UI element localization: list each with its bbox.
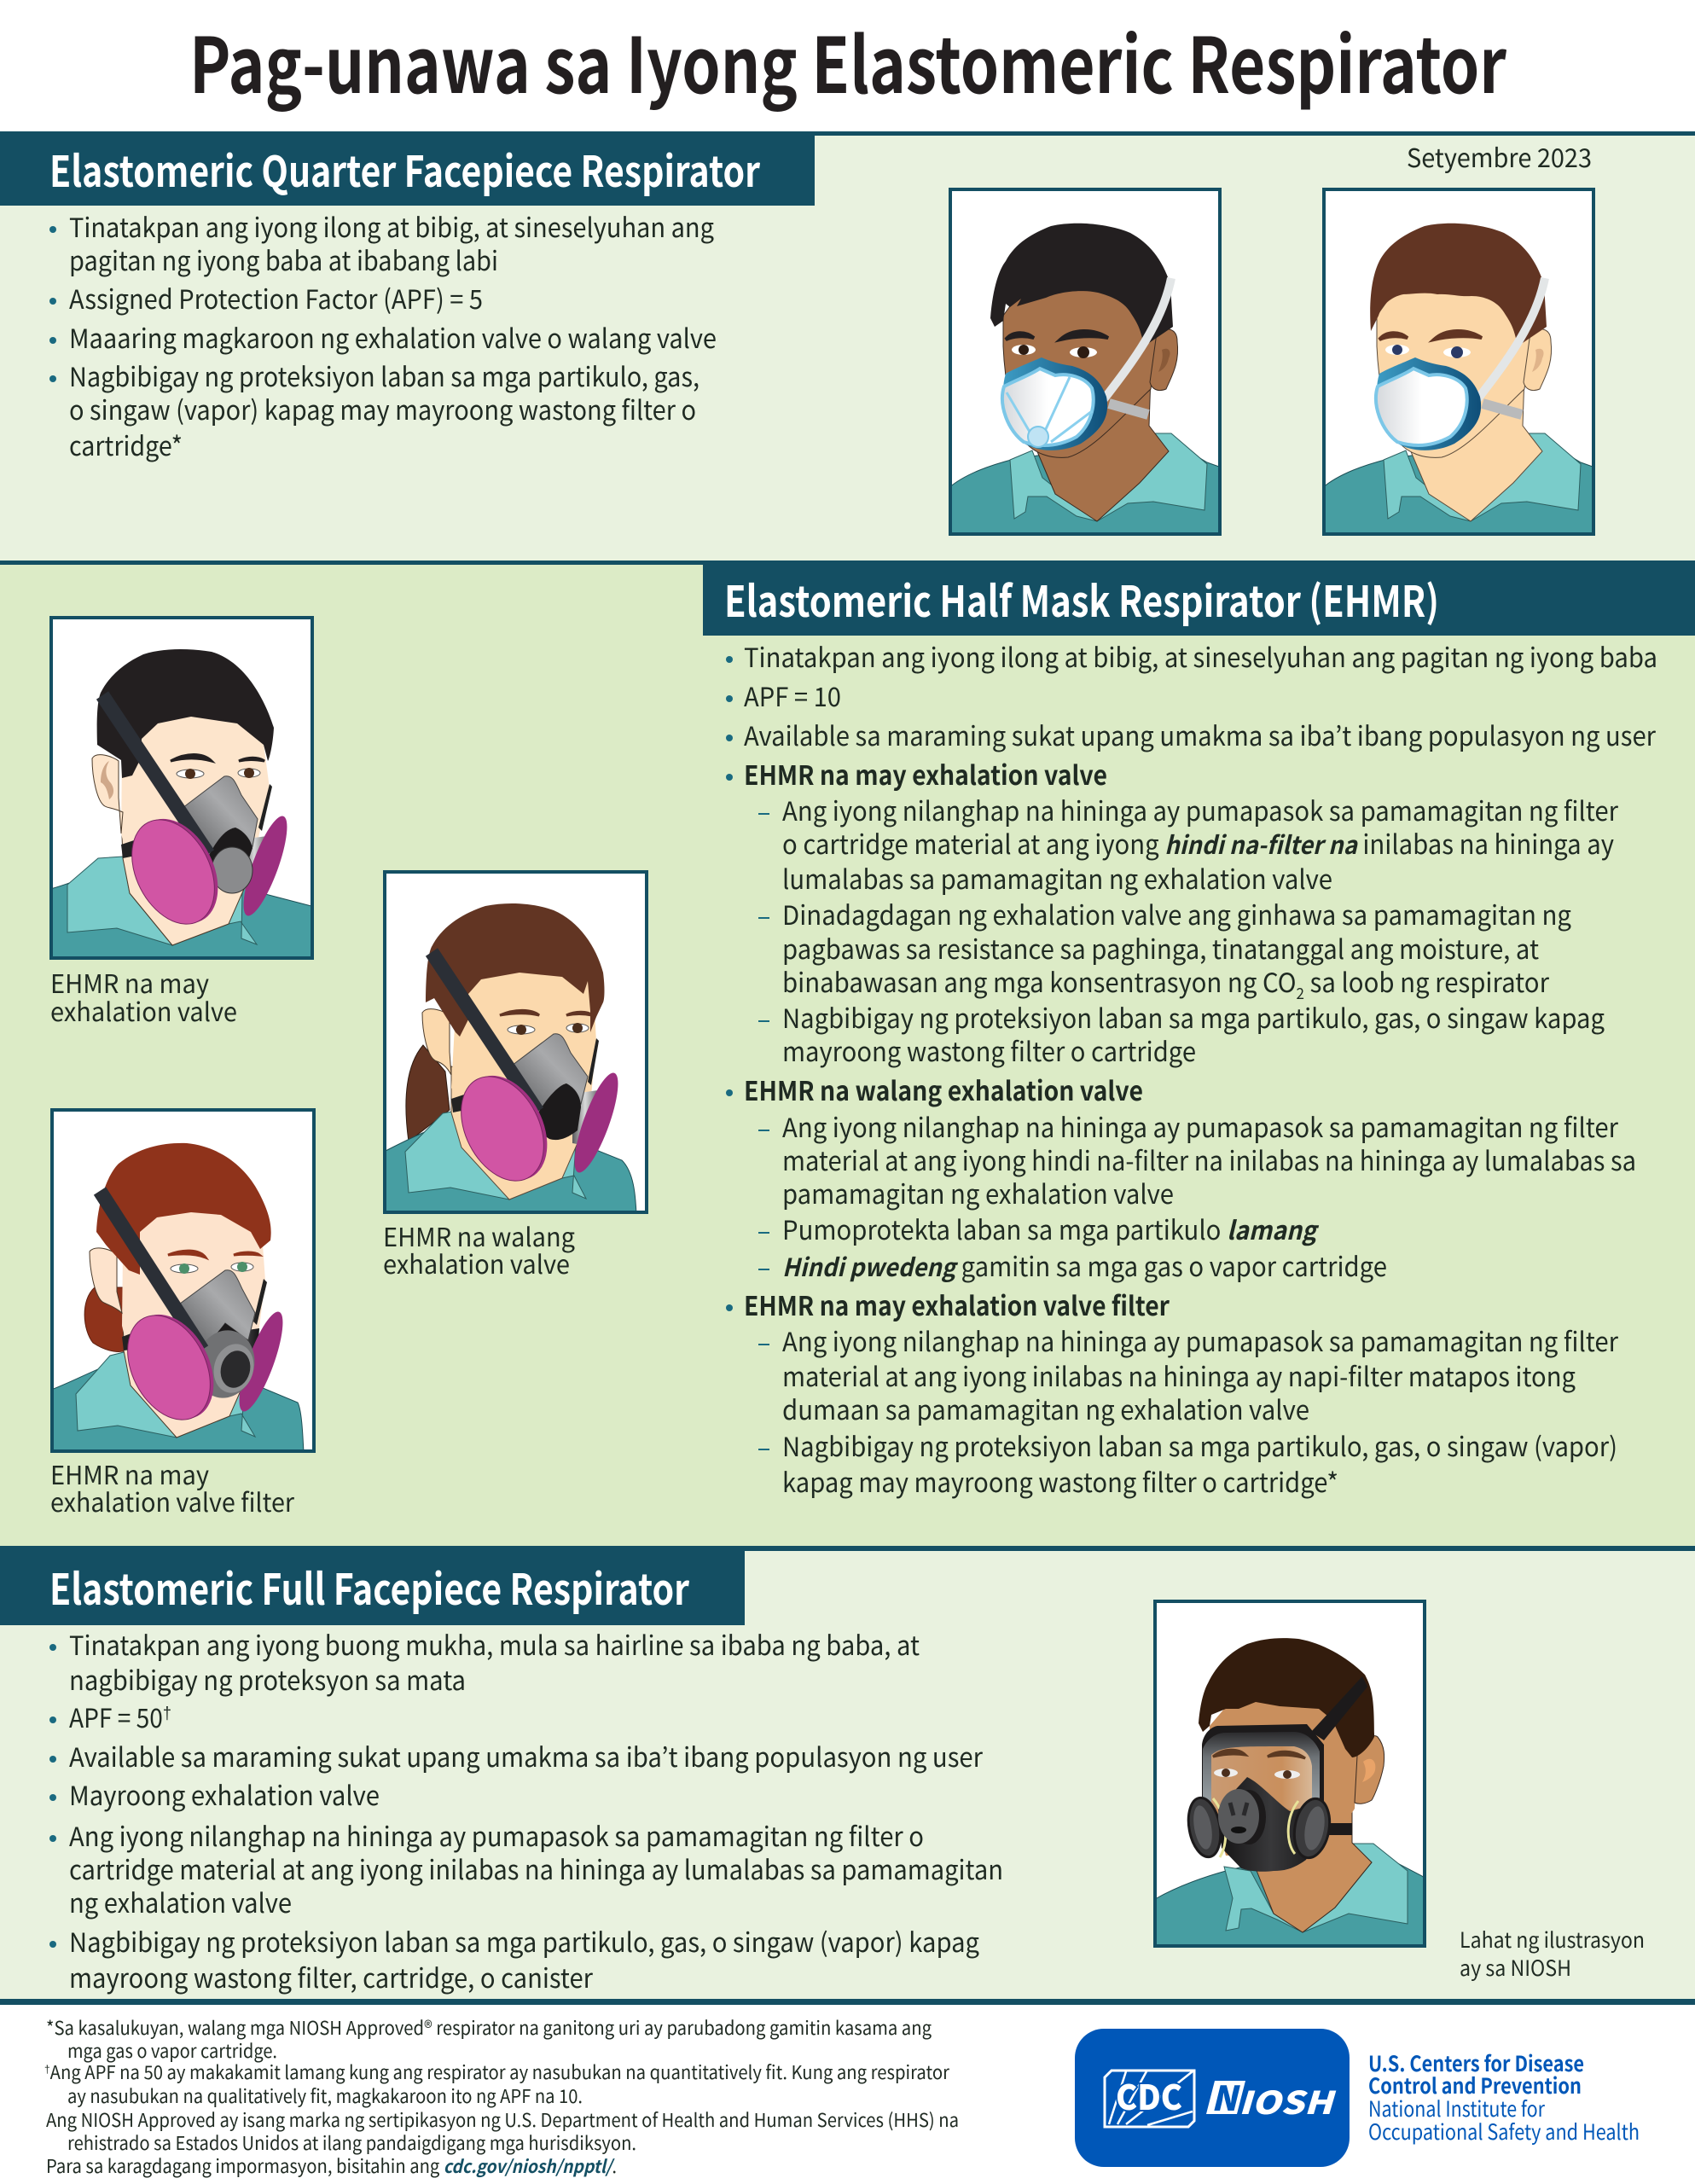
heading: half mask: Elastomeric Half Mask Respirator (EHMR)	[724, 568, 1439, 630]
illustration credit: ay sa NIOSH	[1460, 1952, 1571, 1983]
caption: EHMR without exhalation valve	[383, 1217, 575, 1281]
icon: NIOSH mark	[1206, 2071, 1337, 2123]
caption: EHMR with exhalation valve: exhalation valve	[50, 991, 237, 1029]
caption: EHMR with exhalation valve: EHMR na may	[50, 963, 209, 1001]
divider	[0, 1999, 1695, 2005]
bullet group: EHMR without exhalation valve	[726, 1070, 1636, 1284]
footnotes	[44, 2013, 959, 2179]
panel: half mask respirator	[0, 561, 1695, 1548]
bullet list: full facepiece: †	[163, 1705, 171, 1723]
footnotes: rehistrado sa Estados Unidos at ilang pandaigdigang mga hurisdiksyon.	[67, 2129, 636, 2156]
footnotes: †	[44, 2063, 50, 2076]
bullet list: half mask general	[726, 636, 1657, 753]
bullet list: quarter facepiece: Assigned Protection Factor (APF) = 5	[69, 278, 483, 317]
bullet list: full facepiece: mayroong wastong filter, cartridge, o canister	[69, 1957, 594, 1995]
illustration: EHMR without exhalation valve	[386, 874, 645, 1211]
bullet group: EHMR with exhalation valve: binabawasan ang mga konsentrasyon ng CO	[782, 961, 1325, 1000]
bullet group: EHMR with exhalation valve	[726, 754, 1619, 1069]
agency name: National Institute for	[1368, 2093, 1545, 2123]
footnotes: Ang NIOSH Approved ay isang marka ng sertipikasyon ng U.S. Department of Health and Human Services (HHS) na	[46, 2106, 959, 2133]
bullet group: EHMR with exhalation valve: lumalabas sa pamamagitan ng exhalation valve	[782, 858, 1332, 897]
bullet group: EHMR with exhalation valve filter: dumaan sa pamamagitan ng exhalation valve	[782, 1389, 1309, 1427]
bullet group: EHMR with exhalation valve filter: material at ang iyong inilabas na hininga ay napi-filter matapos itong	[782, 1356, 1576, 1394]
bullet list: full facepiece: Mayroong exhalation valve	[69, 1774, 380, 1813]
bullet list: quarter facepiece: Tinatakpan ang iyong ilong at bibig, at sineselyuhan ang	[69, 206, 714, 245]
logo: CDC NIOSH badge	[1075, 2029, 1350, 2167]
illustration: quarter facepiece, dark skin	[952, 191, 1218, 532]
frame borders: quarter illustrations	[950, 189, 1593, 534]
caption: EHMR with exhalation valve filter: exhalation valve filter	[50, 1482, 294, 1519]
bullet list: full facepiece: Nagbibigay ng proteksiyon laban sa mga partikulo, gas, o singaw (vapor) kapag	[69, 1921, 979, 1960]
bullet group: EHMR without exhalation valve: pamamagitan ng exhalation valve	[782, 1173, 1174, 1211]
bullet list: full facepiece: Available sa maraming sukat upang umakma sa iba’t ibang populasyon ng user	[69, 1736, 984, 1774]
bullet list: quarter facepiece: Nagbibigay ng proteksiyon laban sa mga partikulo, gas,	[69, 356, 699, 394]
bullet list: full facepiece	[49, 1624, 1003, 1995]
bullet list: quarter facepiece: o singaw (vapor) kapag may mayroong wastong filter o	[69, 389, 696, 427]
icon: NIOSH mark: IOSH	[1239, 2077, 1337, 2123]
bullet list: full facepiece: APF = 50	[69, 1697, 172, 1735]
bullet list: full facepiece: nagbibigay ng proteksyon sa mata	[69, 1659, 466, 1698]
bullet list: full facepiece: cartridge material at ang iyong inilabas na hininga ay lumalabas sa pamamagitan	[69, 1849, 1003, 1887]
panel: full facepiece respirator	[0, 1546, 1695, 2001]
footnotes: mga gas o vapor cartridge.	[67, 2036, 277, 2064]
bullet group: EHMR without exhalation valve: Hindi pwedeng gamitin sa mga gas o vapor cartridge	[782, 1246, 1387, 1284]
bullet group: EHMR with exhalation valve: o cartridge material at ang iyong hindi na-filter na inilabas na hininga ay	[782, 823, 1614, 862]
icon: CDC mark: CDC	[1116, 2071, 1182, 2120]
heading: quarter facepiece: Elastomeric Quarter Facepiece Respirator	[49, 138, 760, 200]
panel: quarter facepiece respirator	[0, 131, 1695, 561]
bullet group: EHMR with exhalation valve: mayroong wastong filter o cartridge	[782, 1031, 1196, 1069]
bullet list: full facepiece: Ang iyong nilanghap na hininga ay pumapasok sa pamamagitan ng filter o	[69, 1815, 924, 1854]
bullet group: EHMR with exhalation valve: Ang iyong nilanghap na hininga ay pumapasok sa pamamagitan ng filter	[782, 790, 1619, 828]
illustration: quarter facepiece, light skin	[1326, 191, 1592, 532]
bullet group: EHMR without exhalation valve: material at ang iyong hindi na-filter na inilabas na hininga ay lumalabas sa	[782, 1140, 1636, 1178]
bullet group: EHMR with exhalation valve: EHMR na may exhalation valve	[744, 754, 1107, 793]
heading: full facepiece	[0, 1549, 745, 1625]
bullet list: half mask general: Tinatakpan ang iyong ilong at bibig, at sineselyuhan ang pagitan ng iyong baba	[744, 636, 1657, 675]
caption: EHMR with exhalation valve	[50, 963, 237, 1029]
bullet list: full facepiece: Tinatakpan ang iyong buong mukha, mula sa hairline sa ibaba ng baba, at	[69, 1624, 920, 1663]
illustration: full facepiece	[1157, 1603, 1423, 1944]
bullet group: EHMR without exhalation valve: Ang iyong nilanghap na hininga ay pumapasok sa pamamagitan ng filter	[782, 1107, 1619, 1145]
footnotes: Ang APF na 50 ay makakamit lamang kung ang respirator ay nasubukan na quantitatively fit. Kung ang respirator	[50, 2058, 949, 2085]
agency name: Occupational Safety and Health	[1368, 2116, 1640, 2146]
icon: CDC mark	[1105, 2071, 1194, 2127]
footnotes: *Sa kasalukuyan, walang mga NIOSH Approved® respirator na ganitong uri ay parubadong gamitin kasama ang	[46, 2013, 932, 2041]
heading: full facepiece: Elastomeric Full Facepiece Respirator	[49, 1556, 689, 1618]
caption: EHMR with exhalation valve filter	[50, 1455, 294, 1519]
date: Setyembre 2023	[1407, 137, 1592, 175]
bullet group: EHMR with exhalation valve: pagbawas sa resistance sa paghinga, tinatanggal ang moisture, at	[782, 928, 1539, 967]
illustration credit: Lahat ng ilustrasyon	[1460, 1924, 1645, 1955]
caption: EHMR with exhalation valve filter: EHMR na may	[50, 1455, 209, 1492]
bullet group: EHMR with exhalation valve: 2	[1297, 982, 1304, 1004]
footnotes: Para sa karagdagang impormasyon, bisitahin ang cdc.gov/niosh/npptl/.	[46, 2152, 617, 2179]
bullet group: EHMR with exhalation valve: sa loob ng respirator	[1304, 961, 1550, 1000]
bullet group: EHMR with exhalation valve filter: EHMR na may exhalation valve filter	[744, 1285, 1170, 1323]
bullet list: full facepiece: ng exhalation valve	[69, 1882, 292, 1920]
bullet list: quarter facepiece: pagitan ng iyong baba at ibabang labi	[69, 240, 498, 278]
bullet group: EHMR with exhalation valve filter	[726, 1285, 1619, 1500]
bullet group: EHMR with exhalation valve filter: Nagbibigay ng proteksiyon laban sa mga partikulo, gas, o singaw (vapor)	[782, 1426, 1617, 1464]
agency name: Control and Prevention	[1368, 2070, 1582, 2100]
bullet list: quarter facepiece	[49, 206, 717, 463]
bullet group: EHMR without exhalation valve: EHMR na walang exhalation valve	[744, 1070, 1143, 1108]
icon: NIOSH mark: N	[1211, 2071, 1240, 2121]
bullet list: half mask general: APF = 10	[744, 676, 841, 714]
caption: EHMR without exhalation valve: EHMR na walang	[383, 1217, 575, 1254]
bullet group: EHMR without exhalation valve: Pumoprotekta laban sa mga partikulo lamang	[782, 1209, 1320, 1247]
frame border: full facepiece	[1155, 1601, 1425, 1946]
bullet group: EHMR with exhalation valve: Dinadagdagan ng exhalation valve ang ginhawa sa pamamagitan ng	[782, 894, 1571, 932]
bullet group: EHMR with exhalation valve filter: Ang iyong nilanghap na hininga ay pumapasok sa pamamagitan ng filter	[782, 1321, 1619, 1359]
illustration credit	[1460, 1924, 1645, 1983]
bullet group: EHMR with exhalation valve filter: kapag may mayroong wastong filter o cartridge*	[782, 1461, 1338, 1500]
footnotes: ay nasubukan na qualitatively fit, magkakaroon ito ng APF na 10.	[67, 2082, 583, 2109]
bullet list: quarter facepiece: Maaaring magkaroon ng exhalation valve o walang valve	[69, 317, 717, 356]
bullet group: EHMR with exhalation valve: Nagbibigay ng proteksiyon laban sa mga partikulo, gas, o singaw kapag	[782, 997, 1605, 1036]
caption: EHMR without exhalation valve: exhalation valve	[383, 1244, 570, 1281]
bullet list: quarter facepiece: cartridge*	[69, 425, 183, 463]
illustration: EHMR with exhalation valve	[53, 619, 311, 956]
agency name: U.S. Centers for Disease	[1368, 2048, 1584, 2078]
frame borders: half mask illustrations	[51, 618, 647, 1451]
illustration: EHMR with exhalation valve filter	[54, 1112, 312, 1449]
agency name	[1368, 2048, 1640, 2146]
bullet list: half mask general: Available sa maraming sukat upang umakma sa iba’t ibang populasyon ng user	[744, 715, 1657, 753]
